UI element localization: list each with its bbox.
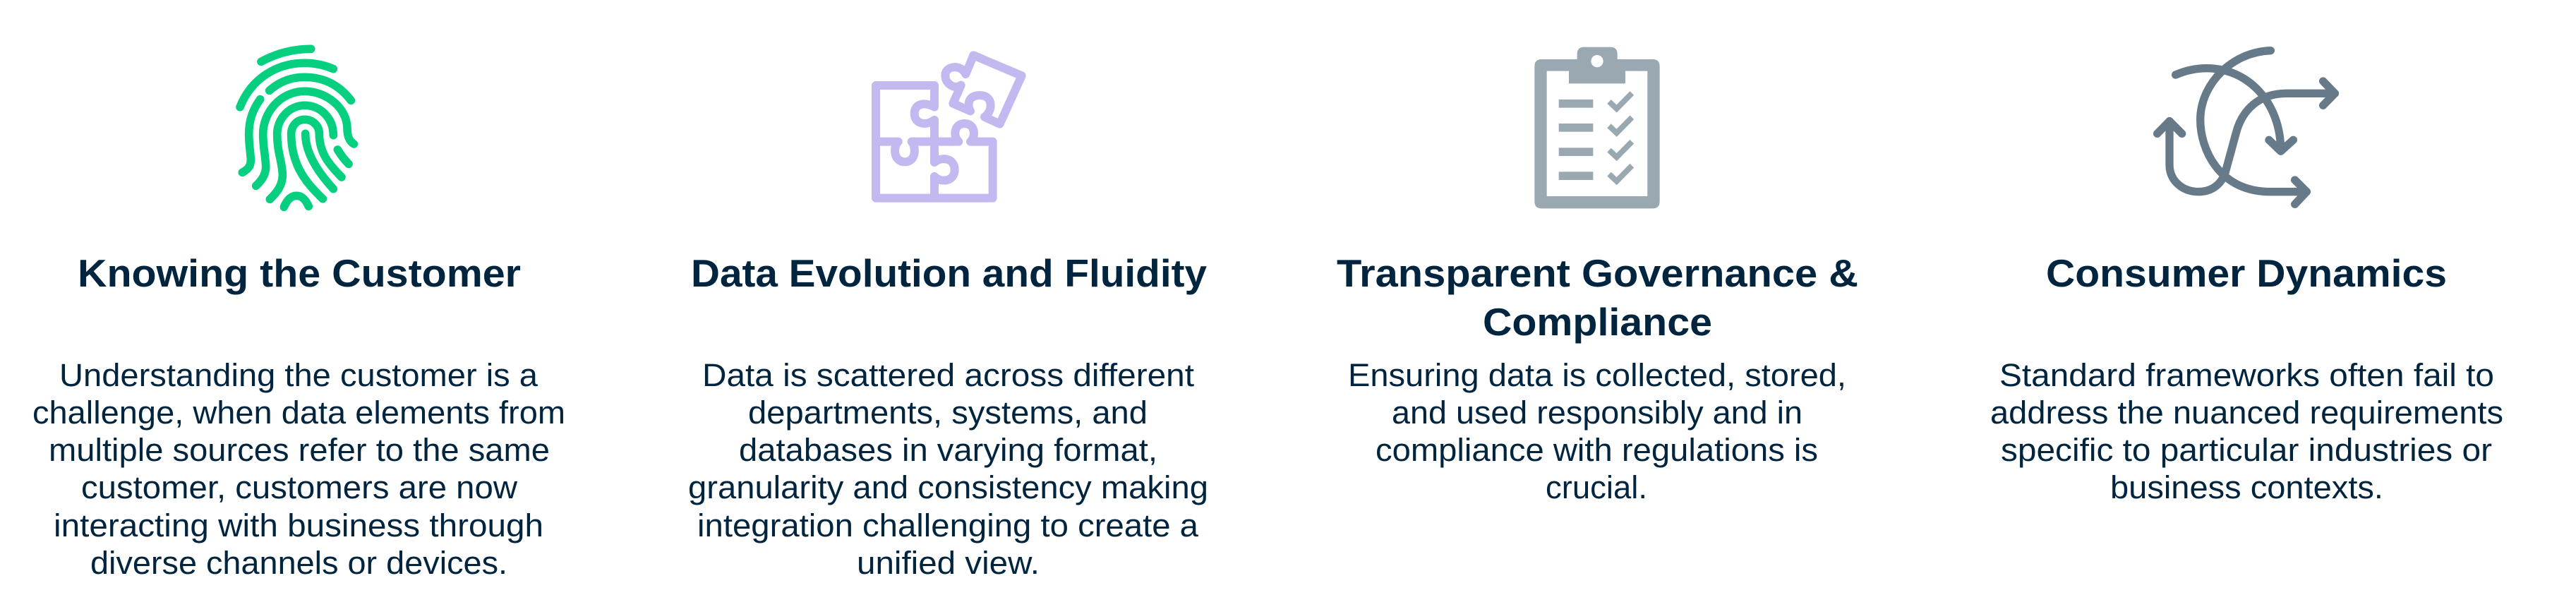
text block: Consumer Dynamics description: address the nuanced requirements — [1990, 395, 2503, 431]
heading: Transparent Governance & Compliance — [1337, 251, 1858, 344]
text block: Governance description — [1348, 357, 1846, 505]
text block: Data Evolution description: Data is scattered across different — [702, 357, 1195, 393]
heading: Transparent Governance & Compliance: Transparent Governance & — [1337, 251, 1858, 295]
text block: Governance description: Ensuring data is collected, stored, — [1348, 357, 1846, 393]
icon: fingerprint — [240, 49, 354, 207]
text block: Consumer Dynamics description — [1990, 357, 2503, 505]
text block: Data Evolution description: departments, systems, and — [748, 395, 1148, 431]
text block: Data Evolution description — [688, 357, 1208, 581]
text block: Governance description: crucial. — [1546, 469, 1647, 505]
text block: Knowing the Customer description: diverse channels or devices. — [90, 545, 507, 581]
text block: Knowing the Customer description: challenge, when data elements from — [32, 395, 565, 431]
text block: Knowing the Customer description — [32, 357, 565, 581]
text block: Knowing the Customer description: customer, customers are now — [81, 469, 518, 505]
text block: Governance description: and used responsibly and in — [1392, 395, 1802, 431]
text block: Consumer Dynamics description: business contexts. — [2110, 469, 2383, 505]
icon: clipboard checklist — [1534, 47, 1660, 208]
text block: Consumer Dynamics description: specific to particular industries or — [2001, 432, 2492, 468]
text block: Data Evolution description: granularity and consistency making — [688, 469, 1208, 505]
text block: Knowing the Customer description: multiple sources refer to the same — [49, 432, 550, 468]
heading: Transparent Governance & Compliance: Compliance — [1483, 300, 1712, 344]
text block: Data Evolution description: integration challenging to create a — [697, 507, 1199, 543]
heading: Consumer Dynamics: Consumer Dynamics — [2046, 251, 2447, 295]
panel: Consumer Dynamics — [1990, 51, 2503, 505]
text block: Data Evolution description: databases in varying format, — [739, 432, 1157, 468]
text block: Governance description: compliance with regulations is — [1376, 432, 1818, 468]
panel: Data Evolution and Fluidity — [688, 55, 1208, 581]
heading: Knowing the Customer: Knowing the Customer — [78, 251, 521, 295]
heading: Data Evolution and Fluidity: Data Evolution and Fluidity — [691, 251, 1207, 295]
text block: Data Evolution description: unified view. — [857, 545, 1040, 581]
icon: puzzle pieces — [876, 55, 1022, 198]
panel: Transparent Governance & Compliance — [1337, 47, 1858, 505]
panel: Knowing the Customer — [32, 49, 565, 581]
text block: Knowing the Customer description: Understanding the customer is a — [59, 357, 538, 393]
text block: Knowing the Customer description: interacting with business through — [54, 507, 543, 543]
icon: crossing arrows — [2157, 51, 2335, 204]
text block: Consumer Dynamics description: Standard frameworks often fail to — [1999, 357, 2494, 393]
